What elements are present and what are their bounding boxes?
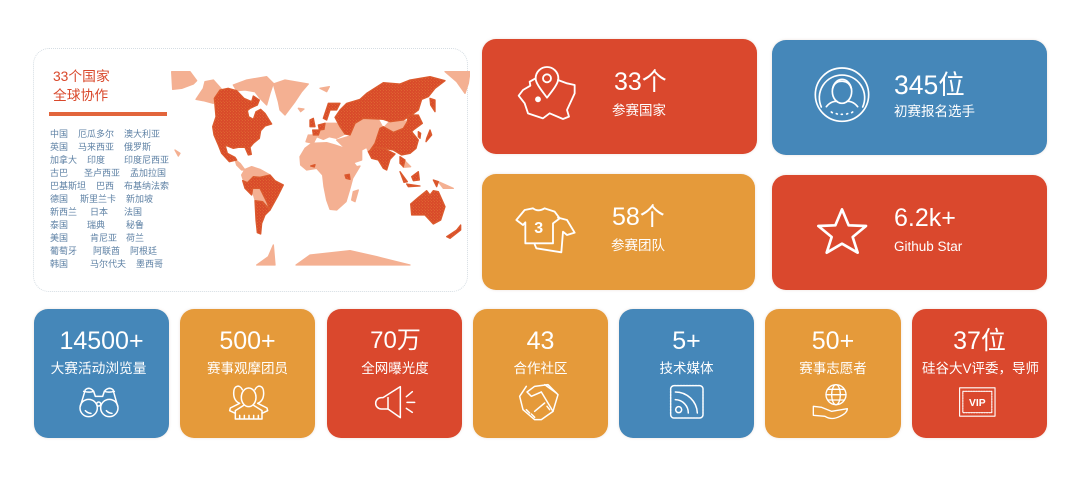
country list: 葡萄牙 [50,246,77,256]
icon: megaphone [374,386,416,418]
country list: 新西兰 [50,207,77,217]
label: 赛事志愿者 [799,361,867,376]
country list: 韩国 [50,259,68,269]
country list: 印度 [87,155,105,165]
label: 初赛报名选手 [894,104,975,119]
value: 345位 [894,70,965,100]
country list: 布基纳法索 [124,181,169,191]
icon: person badge [814,67,870,122]
label: 技术媒体 [660,361,714,376]
country list: 美国 [50,233,68,243]
heading: 33 countries global collaboration [53,69,110,103]
country list: 孟加拉国 [130,168,166,178]
value: 37位 [953,327,1006,355]
icon: team shirts: 3 [534,220,543,237]
value: 70万 [370,327,421,354]
label: 硅谷大V评委，导师 [922,361,1039,376]
country list: 澳大利亚 [124,129,160,139]
card: 345 entrants [772,40,1047,155]
value: 58个 [612,203,665,231]
card: Github stars [772,175,1047,290]
icon: hand holding globe [812,384,848,420]
country list: 瑞典 [87,220,105,230]
country list [50,129,169,269]
country list: 阿联酋 [93,246,120,256]
icon: handshake [518,384,559,420]
value: 50+ [812,327,854,355]
country list: 俄罗斯 [124,142,151,152]
icon: team shirts [515,207,576,254]
value: 500+ [219,327,276,355]
country list: 马尔代夫 [90,259,126,269]
card: page views [34,309,169,438]
label: 合作社区 [514,361,568,376]
country list: 肯尼亚 [90,233,117,243]
country list: 巴基斯坦 [50,181,86,191]
country list: 巴西 [96,181,114,191]
icon: map with pin [518,66,576,120]
card: exposure [327,309,462,438]
country list: 日本 [90,207,108,217]
country list: 马来西亚 [78,142,114,152]
map: participating countries [213,77,461,238]
country list: 古巴 [50,168,68,178]
country list: 墨西哥 [136,259,163,269]
card: volunteers [765,309,901,438]
country list: 加拿大 [50,155,77,165]
heading underline [49,112,167,116]
label: 全网曝光度 [361,361,429,376]
card: judges and mentors [912,309,1047,438]
label: Github Star [894,239,962,254]
card: 58 teams [482,174,755,290]
value: 33个 [614,68,667,96]
value: 14500+ [59,327,144,355]
world map [171,71,470,266]
country list: 印度尼西亚 [124,155,169,165]
label: 赛事观摩团员 [207,361,288,376]
country list: 德国 [50,194,68,204]
icon: VIP badge [959,387,996,417]
label: 参赛国家 [612,103,666,118]
country list: 阿根廷 [130,246,157,256]
country list: 斯里兰卡 [80,194,116,204]
icon: group of people [228,385,268,420]
icon: star [816,208,868,254]
card: audience members [180,309,315,438]
country list: 厄瓜多尔 [78,129,114,139]
map: light land [172,72,470,265]
country list: 英国 [50,142,68,152]
icon: VIP badge: VIP [969,398,986,409]
country list: 圣卢西亚 [84,168,120,178]
country list: 泰国 [50,220,68,230]
country list: 法国 [124,207,142,217]
heading: 33 countries global collaboration: 全球协作 [53,88,108,103]
country list: 秘鲁 [126,220,144,230]
card: tech media [619,309,754,438]
heading: 33 countries global collaboration: 33个国家 [53,69,110,84]
value: 43 [527,327,554,355]
panel: world map and country list [33,48,468,292]
country list: 荷兰 [126,233,144,243]
card: partner communities [473,309,608,438]
icon: RSS [670,384,704,419]
country list: 新加坡 [126,194,153,204]
card: 33 countries [482,39,757,154]
value: 6.2k+ [894,204,956,232]
country list: 中国 [50,129,68,139]
icon: binoculars [79,388,119,418]
label: 大赛活动浏览量 [51,361,146,376]
value: 5+ [672,327,701,355]
label: 参赛团队 [611,238,665,253]
